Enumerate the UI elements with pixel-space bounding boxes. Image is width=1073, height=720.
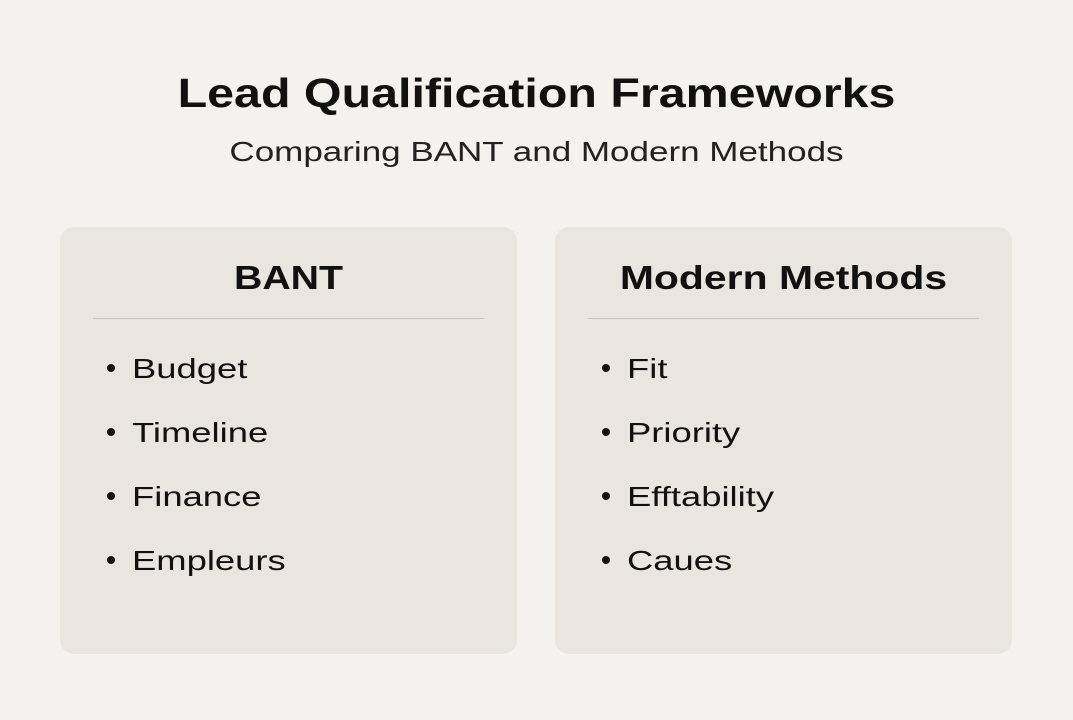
list: modern items: Efftability [627, 481, 774, 512]
list: modern items: Fit [627, 353, 667, 384]
list: BANT items: Empleurs [132, 545, 286, 576]
list: BANT items: Finance [132, 481, 262, 512]
panel: Modern Methods [555, 227, 1012, 654]
list: modern items: Priority [627, 417, 740, 448]
list: BANT items: Budget [132, 353, 247, 384]
list: modern items: Caues [627, 545, 732, 576]
list: BANT items [107, 353, 286, 576]
list: modern items [602, 353, 774, 576]
panel heading: Modern Methods: Modern Methods [620, 259, 947, 296]
subtitle: Comparing BANT and Modern Methods [229, 136, 844, 167]
panel heading: BANT: BANT [234, 259, 343, 296]
title: Lead Qualification Frameworks [178, 70, 895, 116]
list: BANT items: Timeline [132, 417, 268, 448]
panel: BANT [60, 227, 517, 654]
